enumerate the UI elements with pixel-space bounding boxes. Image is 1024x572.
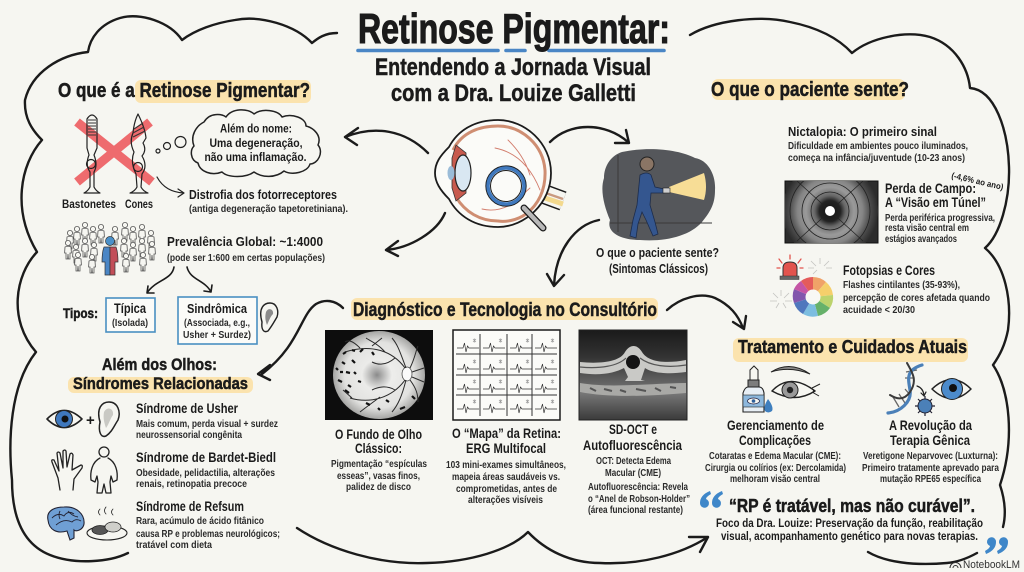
text: dystrophy: (antiga degeneração tapetoretiniana). (189, 204, 348, 215)
caption: patient: (Sintomas Clássicos) (609, 262, 708, 276)
watermark: NotebookLM: NotebookLM (963, 559, 1020, 571)
arrows from eye (345, 127, 629, 256)
annotation: yearly loss: (-4,6% ao ano) (951, 170, 1005, 192)
tunnel text: A “Visão em Túnel” (885, 194, 986, 210)
heading highlight (351, 298, 658, 320)
heading (73, 355, 248, 393)
image: tunnel vision (784, 180, 878, 244)
icon: hand and body (52, 447, 117, 493)
heading highlight (712, 79, 905, 100)
icon: brain and food (48, 507, 127, 540)
icon: colour wheel (793, 277, 833, 317)
illustration: patient with flashlight (602, 149, 715, 240)
ERG caption (446, 425, 566, 506)
photopsia text: acuidade < 20/30 (843, 305, 915, 316)
Usher text: Síndrome de Usher (136, 401, 239, 416)
image: multifocal ERG grid (453, 330, 560, 420)
arrow: to dystrophy (157, 177, 184, 197)
OCT caption: Autofluorescência (583, 437, 682, 453)
icon: eye plus ear (47, 402, 119, 436)
ERG caption: ERG Multifocal (466, 440, 546, 456)
box: syndromic (178, 297, 257, 344)
text: prevalence: (pode ser 1:600 em certas populações) (167, 253, 325, 264)
heading: Tratamento e Cuidados Atuais (738, 337, 967, 357)
tunnel text (885, 180, 995, 245)
icon: closing quote (985, 537, 1008, 554)
heading highlight (135, 80, 311, 103)
text: prevalence (167, 234, 325, 264)
panel: what is RP (58, 80, 348, 344)
ERG caption: mapeia áreas saudáveis vs. (452, 472, 560, 483)
Bardet-Biedl text: Síndrome de Bardet-Biedl (136, 450, 276, 465)
quote: Foco da Dra. Louize: Preservação da função, reabilitação (716, 518, 983, 530)
Usher text: Mais comum, perda visual + surdez (136, 419, 278, 430)
subtitle: com a Dra. Louize Galletti (391, 80, 636, 107)
panel: treatment and care (700, 337, 1008, 554)
quote (716, 496, 983, 543)
title underline (358, 49, 664, 52)
subtitle (375, 54, 651, 107)
complications text: Gerenciamento de (727, 417, 824, 433)
heading: O que é a Retinose Pigmentar? (58, 80, 310, 102)
icon: crowd (65, 222, 155, 275)
optic nerve (533, 189, 563, 204)
ERG caption: alterações visíveis (468, 495, 543, 506)
icon: crossed out photoreceptors (77, 114, 152, 193)
arrows: types (147, 267, 212, 293)
OCT caption: (área funcional restante) (588, 505, 683, 516)
heading highlight (733, 338, 968, 362)
thought bubble: Uma degeneração, (210, 136, 302, 150)
box: typical: (Isolada) (112, 318, 148, 329)
icon: siren and sparks (770, 255, 832, 308)
box: syndromic: Usher + Surdez) (183, 329, 251, 341)
OCT caption: Macular (CME) (605, 468, 661, 479)
night blindness: começa na infância/juventude (10-23 anos) (788, 153, 965, 164)
Usher text: neurossensorial congênita (136, 430, 242, 441)
tunnel text: estágios avançados (885, 234, 957, 245)
gene therapy text: A Revolução da (889, 417, 972, 433)
fundus caption: Clássico: (355, 440, 402, 456)
thought bubble (156, 110, 320, 176)
ERG caption: O “Mapa” da Retina: (452, 425, 561, 441)
fundus caption (331, 426, 427, 493)
complications text (705, 417, 846, 485)
icon: eye cross-section with magnifier (435, 120, 563, 228)
Bardet-Biedl text (136, 450, 276, 490)
label: rods: Bastonetes (62, 199, 116, 211)
label: types: Tipos: (63, 305, 98, 321)
arrows around heading (258, 296, 746, 380)
gene therapy text: Terapia Gênica (890, 432, 970, 448)
magnifier (486, 166, 543, 228)
Bardet-Biedl text: Obesidade, pelidactilia, alterações (136, 468, 275, 479)
complications text: melhoram visão central (730, 474, 820, 485)
fundus caption: esseas”, vasas finos, (337, 471, 420, 482)
panel: patient symptoms (711, 79, 1005, 317)
heading: Síndromes Relacionadas (73, 374, 248, 393)
caption: patient: O que o paciente sente? (596, 246, 719, 260)
heading: Diagnóstico e Tecnologia no Consultório (353, 300, 657, 321)
gene therapy text: mutação RPE65 específica (880, 474, 981, 485)
text: prevalence: Prevalência Global: ~1:4000 (167, 234, 323, 249)
photopsia text: Fotopsias e Cores (843, 263, 935, 278)
fundus caption: O Fundo de Olho (335, 426, 422, 442)
Bardet-Biedl text: renais, retinopatia precoce (136, 479, 247, 490)
Refsum text (136, 499, 280, 551)
tunnel text: resta visão central em (885, 223, 969, 234)
tunnel text: Perda periférica progressiva, (885, 213, 995, 224)
panel: diagnosis and technology (258, 296, 746, 516)
icon: eye plus ear: + (86, 412, 95, 429)
icon: ear (261, 303, 278, 332)
image: fundus (325, 330, 433, 420)
image: OCT scan (579, 330, 687, 420)
OCT caption: OCT: Detecta Edema (596, 456, 671, 467)
Refsum text: tratável com dieta (136, 540, 212, 551)
complications text: Complicações (739, 432, 811, 448)
fundus caption: palidez de disco (346, 482, 411, 493)
heading highlight (68, 377, 253, 393)
OCT caption (583, 421, 690, 516)
caption: patient (596, 246, 719, 276)
gene therapy text: Primeiro tratamente aprevado para (862, 463, 999, 474)
tunnel text: Perda de Campo: (885, 180, 976, 196)
Refsum text: causa RP e problemas neurológicos; (136, 529, 280, 540)
heading: Além dos Olhos: (102, 355, 217, 374)
complications text: Cirurgia ou colírios (ex: Dercolamida) (705, 463, 846, 474)
gene therapy text (862, 417, 999, 485)
title text: Retinose Pigmentar: (358, 5, 670, 52)
OCT caption: SD-OCT e (609, 421, 657, 437)
night blindness: Dificuldade em ambientes pouco iluminados, (788, 141, 968, 152)
fundus caption: Pigmentação “espículas (331, 459, 427, 470)
complications text: Cotaratas e Edema Macular (CME): (709, 451, 841, 462)
icon: eye drops and eye (743, 366, 820, 412)
thought bubble: não uma inflamação. (204, 150, 306, 164)
OCT caption: Autofluorescência: Revela (588, 482, 688, 493)
subtitle: Entendendo a Jornada Visual (375, 54, 651, 81)
photopsia text (843, 263, 990, 316)
box: typical (106, 298, 155, 332)
OCT caption: o “Anel de Robson-Holder” (588, 494, 690, 505)
ERG caption: comprometidas, antes de (456, 484, 557, 495)
thought bubble: Além do nome: (220, 122, 292, 136)
box: syndromic: Sindrômica (187, 301, 248, 316)
heading: O que o paciente sente? (711, 79, 909, 101)
quote: “RP é tratável, mas não curável”. (729, 496, 975, 516)
Refsum text: Síndrome de Refsum (136, 499, 244, 514)
label: cones: Cones (125, 199, 153, 211)
box: syndromic: (Associada, e.g., (184, 317, 250, 329)
Refsum text: Rara, acúmulo de ácido fitânico (136, 516, 264, 527)
arrow: patient to diagnosis (547, 220, 599, 286)
photopsia text: Flashes cintilantes (35-93%), (843, 280, 960, 291)
icon: opening quote (700, 491, 723, 508)
icon: DNA, virus and eye (888, 363, 971, 416)
text: dystrophy (189, 187, 348, 215)
night blindness (788, 124, 968, 164)
photopsia text: percepção de cores afetada quando (843, 293, 990, 304)
night blindness: Nictalopia: O primeiro sinal (788, 124, 937, 139)
panel: related syndromes (47, 355, 280, 551)
box: typical: Típica (114, 300, 146, 316)
Usher text (136, 401, 278, 441)
text: dystrophy: Distrofia dos fotorreceptores (189, 187, 337, 202)
ERG caption: 103 mini-exames simultâneos, (446, 460, 566, 471)
quote: visual, acompanhamento genético para novas terapias. (721, 531, 978, 543)
